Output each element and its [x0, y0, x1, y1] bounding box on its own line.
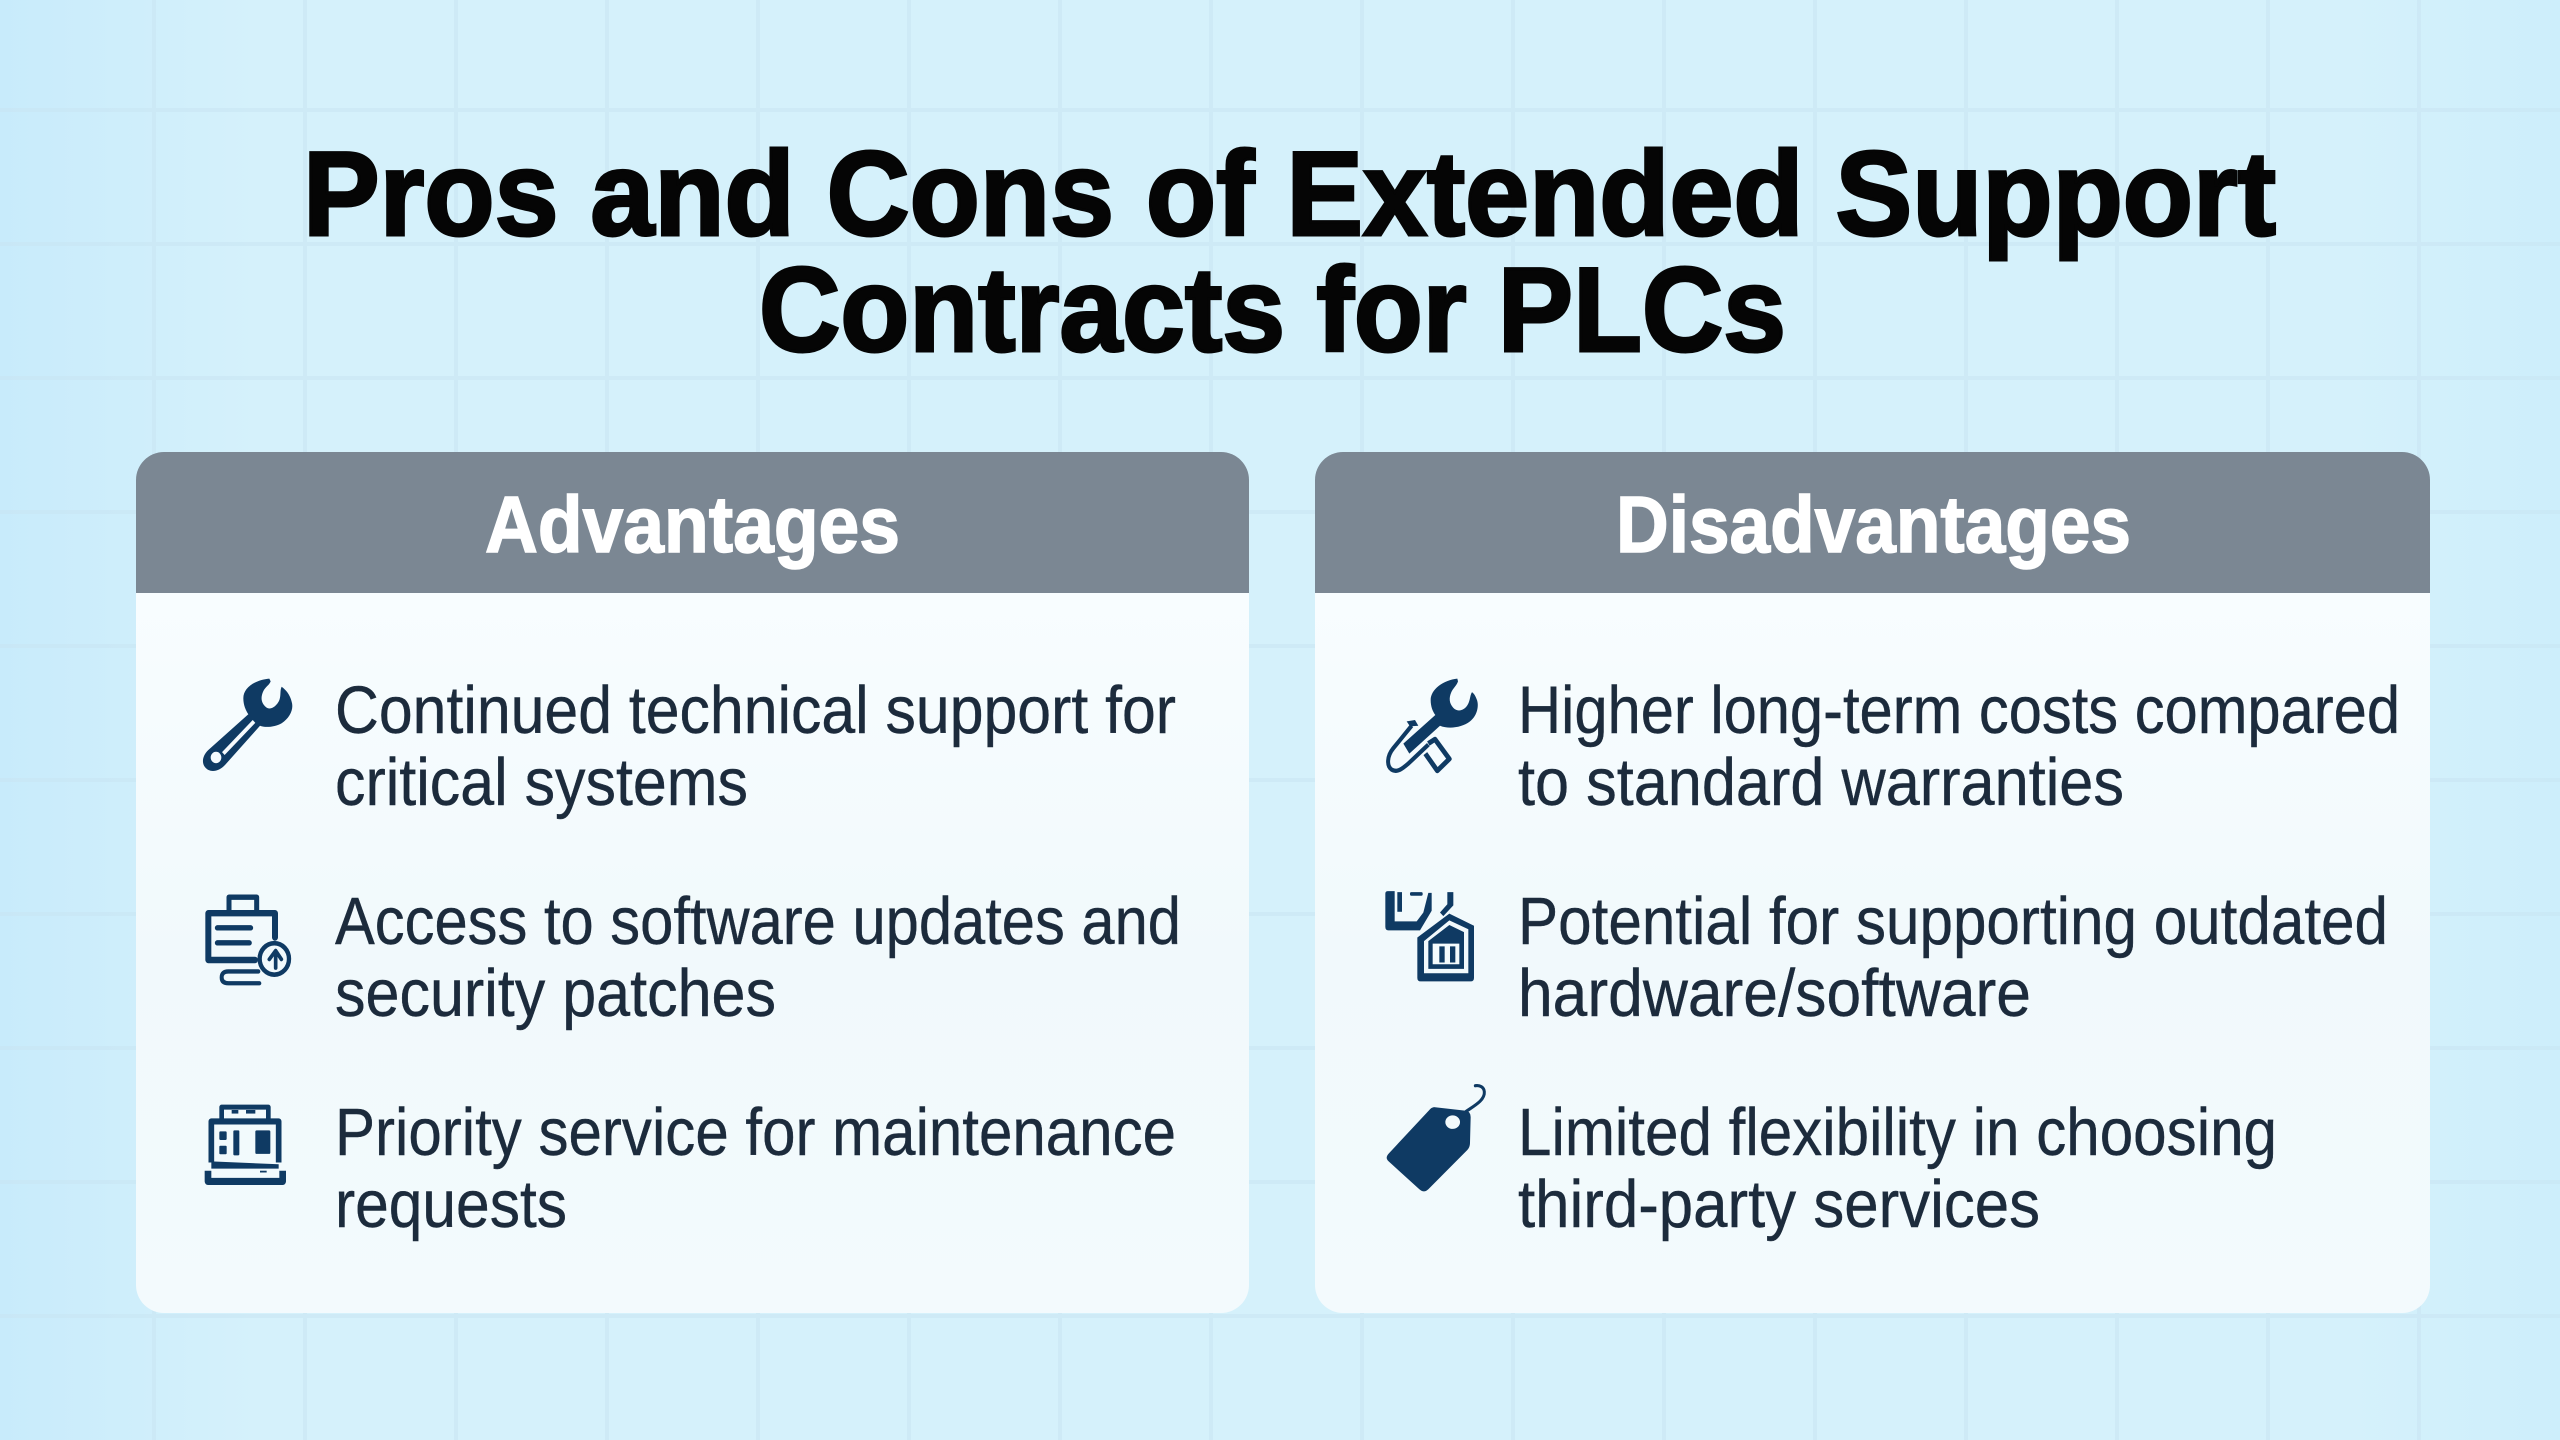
title — [303, 127, 2276, 377]
icon: price tag — [1387, 1086, 1484, 1191]
text: outdated hardware: Potential for supporting outdated — [1518, 884, 2388, 959]
text: outdated hardware — [1518, 884, 2388, 1031]
text: higher costs — [1518, 673, 2400, 820]
icon: wrench — [203, 679, 292, 771]
icon: control unit — [208, 1107, 283, 1181]
text: software updates: Access to software updates and — [335, 884, 1181, 959]
text: continued technical support — [335, 673, 1176, 820]
text: limited flexibility — [1518, 1095, 2277, 1242]
text: limited flexibility: Limited flexibility in choosing — [1518, 1095, 2277, 1170]
text: software updates — [335, 884, 1181, 1031]
icon: wrench and key — [1388, 679, 1478, 771]
text: software updates: security patches — [335, 956, 776, 1031]
text: limited flexibility: third-party services — [1518, 1167, 2040, 1242]
text: priority service: Priority service for maintenance — [335, 1095, 1176, 1170]
text: continued technical support: Continued technical support for — [335, 673, 1176, 748]
text: priority service: requests — [335, 1167, 567, 1242]
disadvantages header bar — [1315, 452, 2430, 593]
text: higher costs: Higher long-term costs compared — [1518, 673, 2400, 748]
text: continued technical support: critical systems — [335, 745, 748, 820]
advantages heading: Advantages — [485, 480, 900, 569]
icon: software update document — [208, 897, 289, 983]
text: priority service — [335, 1095, 1176, 1242]
text: higher costs: to standard warranties — [1518, 745, 2124, 820]
advantages header bar — [136, 452, 1249, 593]
advantages card body — [136, 593, 1249, 1313]
title: Pros and Cons of Extended Support — [303, 127, 2276, 261]
title: Contracts for PLCs — [759, 243, 1786, 377]
icon: outdated hardware — [1385, 891, 1474, 981]
panel: disadvantages — [1315, 452, 2430, 1313]
disadvantages heading: Disadvantages — [1616, 480, 2131, 569]
text: outdated hardware: hardware/software — [1518, 956, 2031, 1031]
disadvantages card body — [1315, 593, 2430, 1313]
panel: advantages — [136, 452, 1249, 1313]
